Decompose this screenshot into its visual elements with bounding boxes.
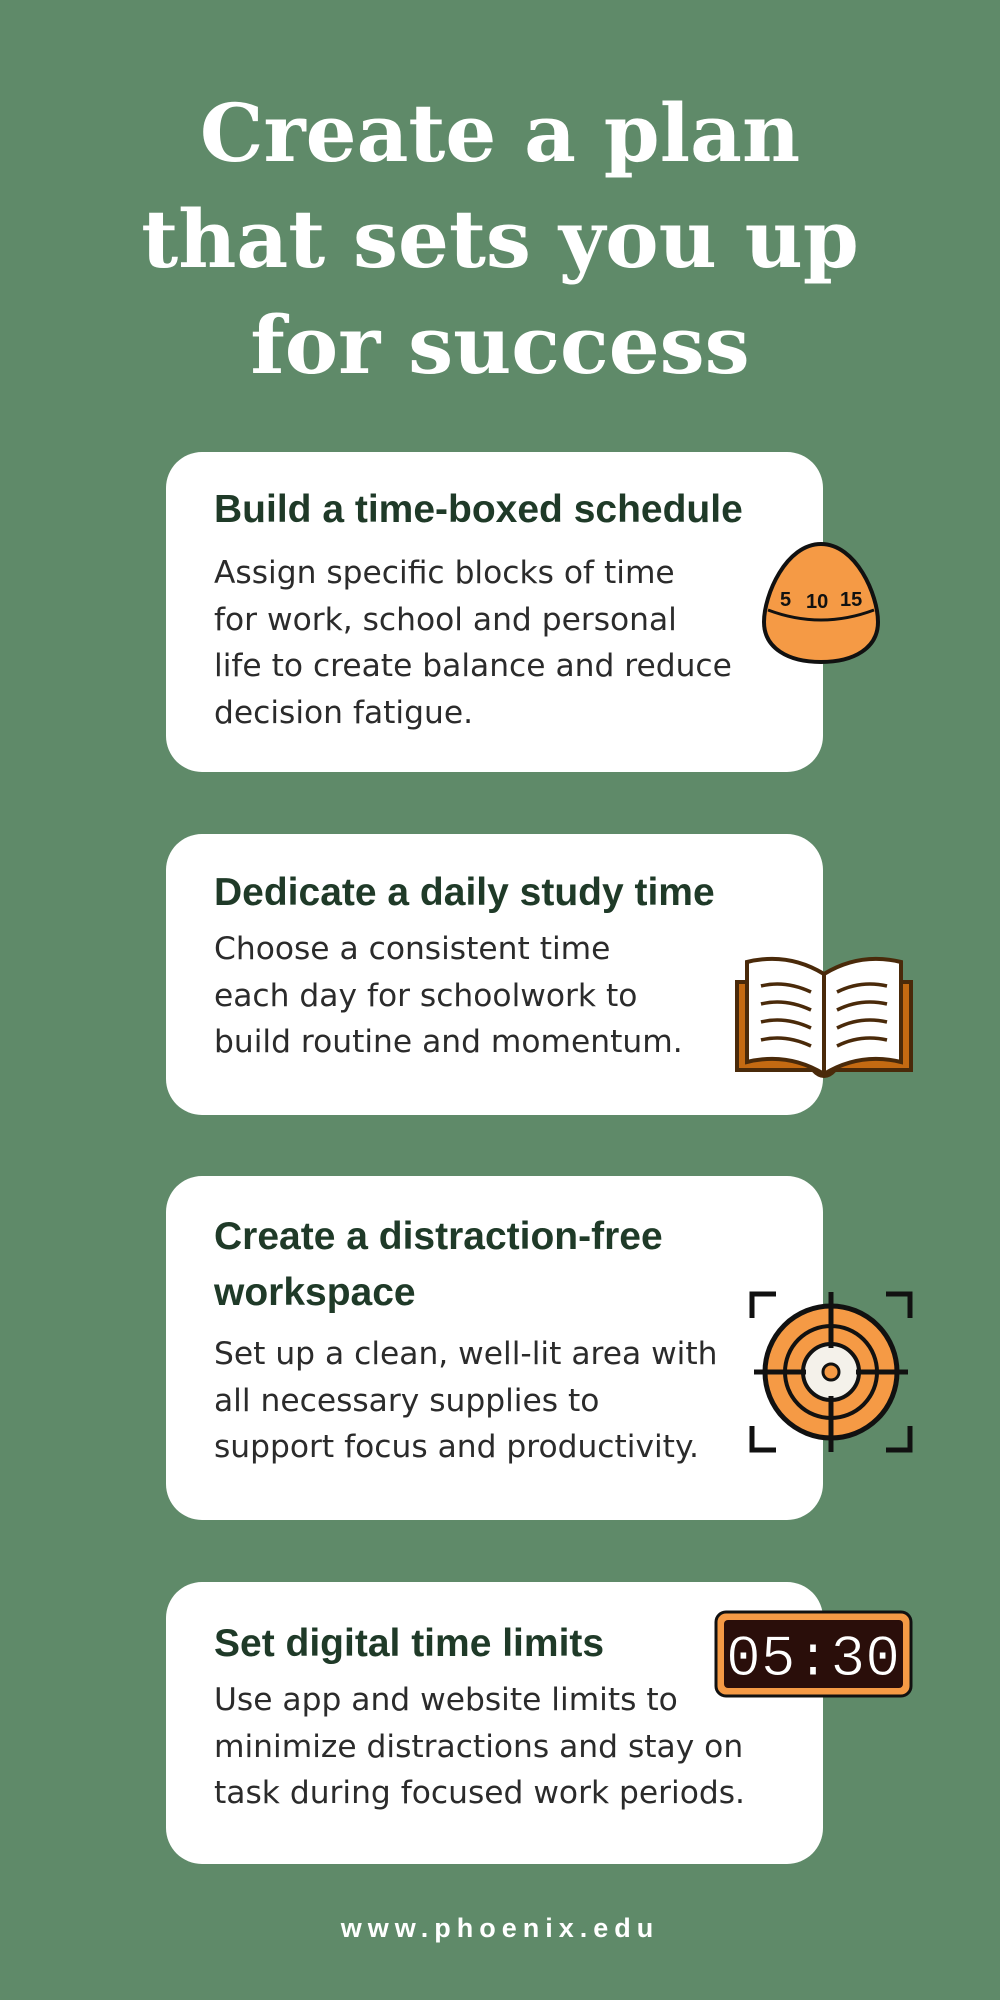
text block: Choose a consistent time xyxy=(214,931,610,967)
text block: build routine and momentum. xyxy=(214,1024,683,1060)
title: Create a plan xyxy=(200,86,800,180)
text block: Use app and website limits to xyxy=(214,1682,678,1718)
panel: distraction-free workspace xyxy=(166,1176,823,1520)
text block: all necessary supplies to xyxy=(214,1382,599,1418)
icon: egg timer xyxy=(762,542,880,664)
panel: daily study time xyxy=(166,834,823,1115)
text block: each day for schoolwork to xyxy=(214,978,637,1014)
panel: digital time limits xyxy=(166,1582,823,1864)
text block: Assign specific blocks of time xyxy=(214,555,675,591)
text block xyxy=(214,931,683,1060)
text block xyxy=(214,1336,717,1465)
panel: time-boxed schedule xyxy=(166,452,823,772)
text block: Set up a clean, well-lit area with xyxy=(214,1336,717,1372)
text block: life to create balance and reduce xyxy=(214,648,732,684)
heading: Dedicate a daily study time xyxy=(214,871,715,914)
icon: egg timer: 5 xyxy=(780,589,791,611)
title: that sets you up xyxy=(141,192,859,286)
title: for success xyxy=(250,298,750,392)
heading: workspace xyxy=(214,1271,416,1314)
text block xyxy=(214,555,732,730)
text block: support focus and productivity. xyxy=(214,1429,699,1465)
icon: egg timer: 10 xyxy=(806,591,828,613)
text block xyxy=(214,1682,745,1811)
text block: decision fatigue. xyxy=(214,694,473,730)
heading: Set digital time limits xyxy=(214,1622,604,1665)
heading: Build a time-boxed schedule xyxy=(214,488,743,531)
heading: Create a distraction-free xyxy=(214,1215,663,1258)
text block: task during focused work periods. xyxy=(214,1775,745,1811)
icon: egg timer: 15 xyxy=(840,589,862,611)
text block: minimize distractions and stay on xyxy=(214,1728,743,1764)
icon: digital clock xyxy=(714,1610,912,1698)
icon: digital clock: 05:30 xyxy=(726,1628,900,1693)
icon: target xyxy=(750,1292,912,1452)
icon: book xyxy=(735,956,913,1078)
text block: for work, school and personal xyxy=(214,602,677,638)
heading xyxy=(214,1215,663,1314)
title xyxy=(141,86,859,392)
footer: www.phoenix.edu xyxy=(341,1913,659,1943)
